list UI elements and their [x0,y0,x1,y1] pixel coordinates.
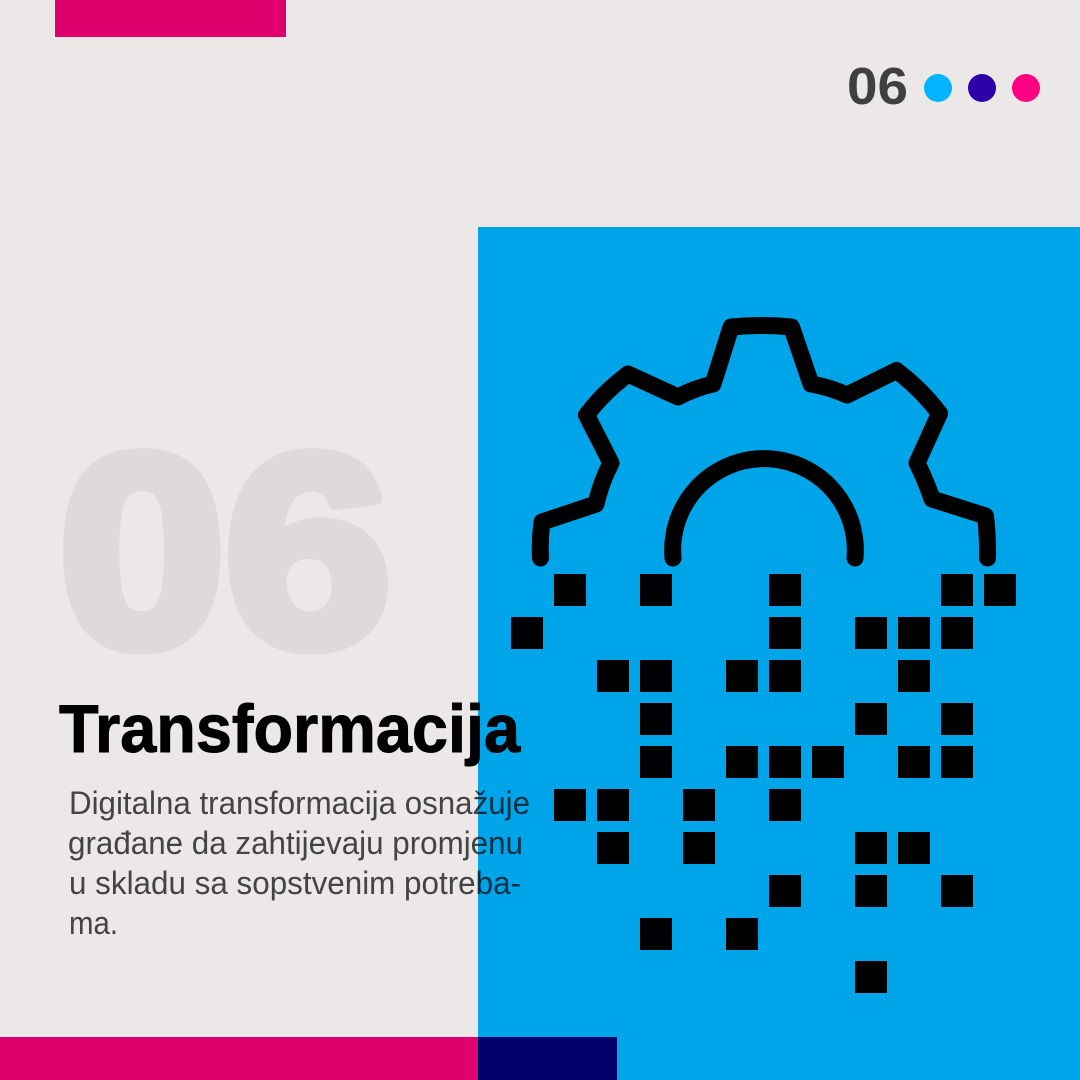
page indicator [847,58,1040,116]
pixel squares [511,574,1016,993]
cyan dot [924,74,952,102]
description line 1: Digitalna transformacija osnažuje [69,785,530,821]
description line 4: ma. [69,905,118,941]
large background number: 06 [59,399,391,703]
title: Transformacija [59,691,521,767]
description line 2: građane da zahtijevaju promjenu [68,825,523,861]
gear inner arc [673,459,855,558]
magenta dot [1012,74,1040,102]
bottom pink bar [0,1037,478,1080]
bottom navy bar [478,1037,617,1080]
gear outline [540,326,988,558]
description line 3: u skladu sa sopstvenim potreba- [69,865,521,901]
description text [68,785,530,941]
top pink accent bar [55,0,286,37]
blue panel [478,227,1080,1080]
indigo dot [968,74,996,102]
icon: gear dissolving into pixels [511,326,1016,993]
small page number: 06 [847,58,908,116]
